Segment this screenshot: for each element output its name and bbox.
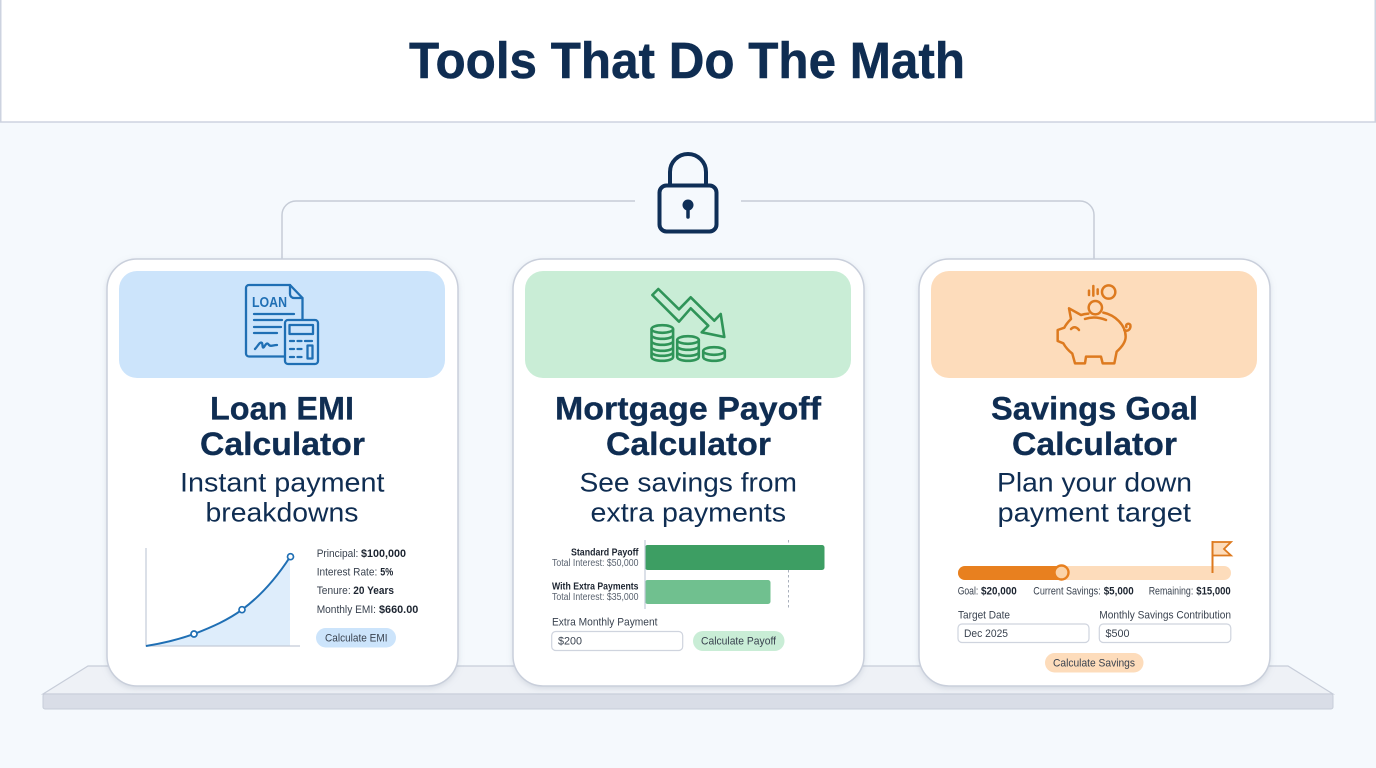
- loan figures: [317, 548, 418, 616]
- card subtitle: loan: breakdowns: [206, 498, 358, 528]
- card title: mortgage: [555, 390, 821, 462]
- button: calculate savings: Calculate Savings: [1053, 658, 1135, 670]
- card title: savings: Savings Goal: [991, 390, 1198, 426]
- button: calculate EMI: [316, 628, 396, 648]
- button: calculate payoff: [693, 631, 784, 651]
- card title: savings: Calculator: [1012, 426, 1177, 462]
- savings figures: $5,000: [1104, 586, 1134, 598]
- line chart: EMI curve: [146, 548, 300, 646]
- button: calculate EMI: Calculate EMI: [325, 632, 388, 644]
- savings figures: Goal:: [958, 586, 978, 598]
- card title: savings: [991, 390, 1198, 462]
- icon: padlock: [660, 154, 716, 232]
- input: target date: Dec 2025: [964, 628, 1008, 640]
- panel: savings goal calculator: [919, 259, 1270, 686]
- icon: falling arrow and coin stacks: [652, 289, 725, 361]
- card subtitle: savings: Plan your down: [997, 468, 1192, 498]
- loan figures: 5%: [380, 567, 393, 579]
- card subtitle: loan: [180, 468, 385, 528]
- card subtitle: savings: payment target: [998, 498, 1192, 528]
- loan figures: 20 Years: [353, 585, 394, 597]
- bar chart: payoff comparison: [552, 540, 824, 609]
- progress bar with goal flag: [958, 541, 1231, 580]
- loan figures: $100,000: [361, 548, 406, 560]
- bar chart: payoff comparison: Total Interest: $50,000: [552, 558, 639, 569]
- title banner: [1, 0, 1375, 122]
- input: monthly savings contribution: $500: [1106, 628, 1130, 640]
- panel: loan EMI calculator: [107, 259, 458, 686]
- savings figures: [958, 586, 1231, 598]
- input: monthly savings contribution: [1099, 610, 1231, 642]
- savings figures: $20,000: [981, 586, 1017, 598]
- card title: mortgage: Calculator: [606, 426, 771, 462]
- card subtitle: mortgage: [580, 468, 797, 528]
- bar chart: payoff comparison: Standard Payoff: [571, 548, 639, 558]
- savings figures: $15,000: [1196, 586, 1231, 598]
- savings figures: Current Savings:: [1033, 586, 1101, 598]
- card subtitle: savings: [997, 468, 1192, 528]
- loan figures: Interest Rate:: [317, 567, 377, 579]
- icon: loan document and calculator: LOAN: [252, 295, 287, 311]
- card header: savings: [931, 271, 1257, 378]
- loan figures: Tenure:: [317, 585, 351, 597]
- panel: mortgage payoff calculator: [513, 259, 864, 686]
- input: extra monthly payment: Extra Monthly Payment: [552, 616, 658, 628]
- loan figures: Principal:: [317, 548, 358, 560]
- input: extra monthly payment: $200: [558, 636, 582, 648]
- input: target date: [958, 610, 1089, 642]
- bar chart: payoff comparison: With Extra Payments: [552, 582, 639, 592]
- savings figures: Remaining:: [1149, 586, 1193, 598]
- button: calculate savings: [1045, 653, 1144, 672]
- card title: mortgage: Mortgage Payoff: [555, 390, 821, 426]
- title: Tools That Do The Math: [409, 32, 965, 89]
- loan figures: $660.00: [379, 604, 418, 616]
- button: calculate payoff: Calculate Payoff: [701, 636, 777, 648]
- icon: piggy bank with coins: [1058, 285, 1130, 363]
- card subtitle: mortgage: extra payments: [590, 498, 786, 528]
- input: monthly savings contribution: Monthly Savings Contribution: [1099, 610, 1231, 622]
- card header: mortgage: [525, 271, 851, 378]
- card title: loan: Loan EMI: [210, 390, 354, 426]
- card header: loan: [119, 271, 445, 378]
- connector lines: [282, 201, 1094, 260]
- input: extra monthly payment: [552, 616, 683, 650]
- card subtitle: mortgage: See savings from: [580, 468, 797, 498]
- shelf: [43, 666, 1333, 709]
- loan figures: Monthly EMI:: [317, 604, 376, 616]
- card title: loan: [200, 390, 365, 462]
- bar chart: payoff comparison: Total Interest: $35,000: [552, 592, 639, 603]
- icon: loan document and calculator: [246, 285, 318, 364]
- card subtitle: loan: Instant payment: [180, 468, 385, 498]
- input: target date: Target Date: [958, 610, 1010, 622]
- card title: loan: Calculator: [200, 426, 365, 462]
